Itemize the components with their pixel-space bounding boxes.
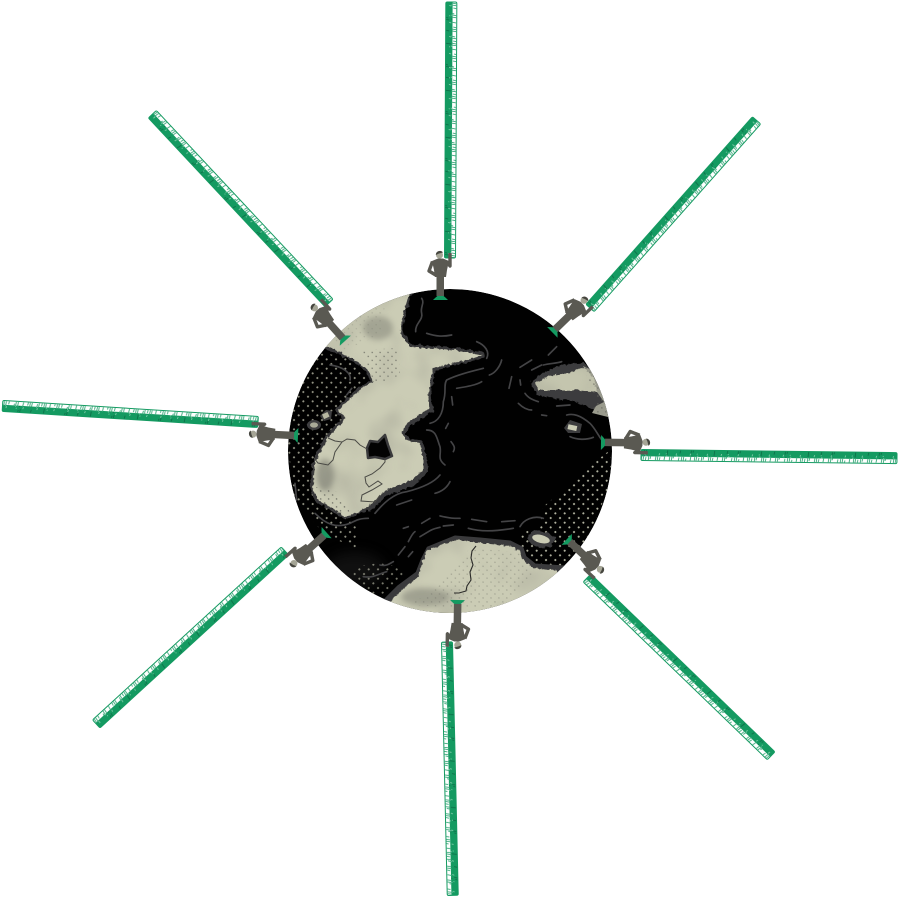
east coast dark band — [368, 372, 433, 510]
rivers — [314, 438, 385, 502]
land shading: west — [316, 459, 334, 491]
ocean haze: south-west — [332, 554, 381, 586]
land halftone: south-west — [316, 487, 350, 514]
bar: bottom right — [583, 574, 775, 760]
land shading: bottom rim — [401, 588, 449, 606]
land halftone: north rim — [336, 308, 384, 349]
bar: top right — [586, 117, 761, 312]
coastal halo: main continent — [300, 280, 482, 517]
island: east land — [567, 424, 577, 431]
figure: bottom left — [284, 526, 334, 574]
figure: bottom — [447, 600, 469, 649]
land: right peninsula — [535, 367, 598, 392]
ocean disc — [288, 289, 612, 613]
figure: top left — [304, 298, 352, 348]
figure: bottom right — [560, 531, 610, 580]
land: right rim — [583, 366, 608, 417]
land: bottom continent — [391, 540, 558, 613]
land: main continent — [312, 294, 483, 517]
left ocean halftone — [284, 352, 368, 548]
lower-left ocean halftone — [351, 564, 402, 594]
bar: bottom — [442, 642, 458, 895]
figure: top right — [544, 290, 594, 339]
land shading: north — [363, 316, 393, 340]
bar: left — [2, 400, 258, 427]
land halftone: bottom — [415, 550, 532, 606]
island: south-east — [528, 530, 556, 548]
figure: right — [601, 431, 650, 453]
halo: right land — [530, 362, 608, 417]
bar: bottom left — [93, 547, 289, 728]
island: west lower land — [310, 422, 318, 428]
bar: right — [641, 450, 897, 464]
island: west upper land — [322, 412, 330, 419]
lake — [367, 435, 392, 459]
globe — [284, 280, 620, 625]
bottom river — [454, 546, 476, 593]
island: west lower — [307, 420, 321, 430]
halo: bottom land — [384, 536, 564, 613]
island: south-east land — [532, 534, 550, 544]
bar: top left — [148, 110, 333, 307]
bar: top — [445, 2, 457, 258]
ocean current lines — [295, 298, 605, 577]
land halftone: north — [364, 348, 400, 381]
lower-right ocean halftone — [520, 450, 612, 568]
figure: left — [248, 423, 299, 447]
land halftone: right rim — [585, 368, 606, 412]
island: west upper — [320, 410, 332, 421]
island: east — [564, 420, 582, 433]
figure: top — [429, 251, 450, 300]
